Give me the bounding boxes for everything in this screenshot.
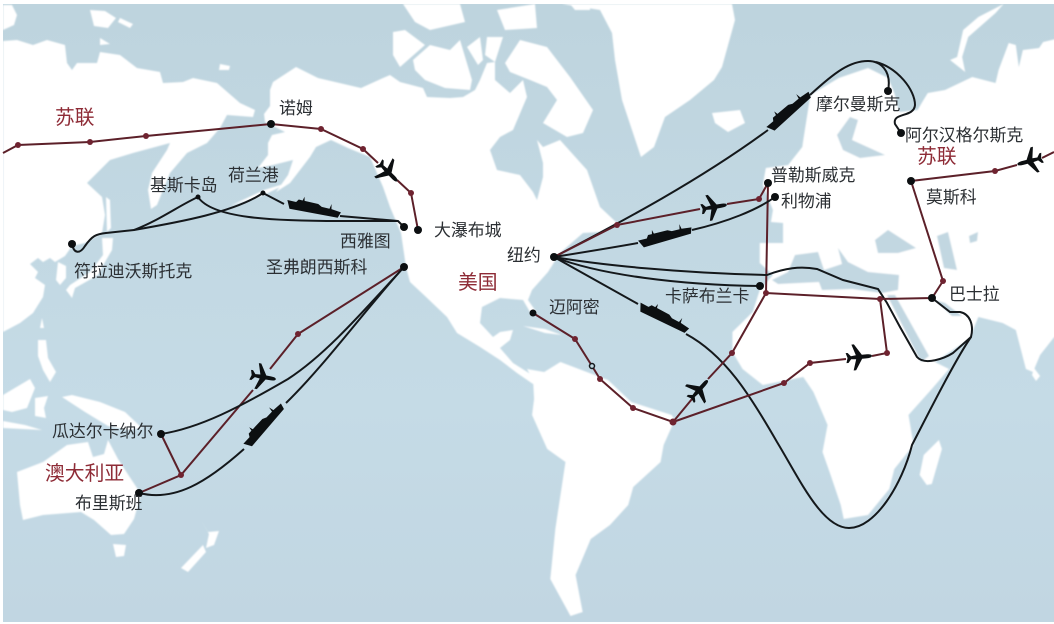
labels [45, 95, 1023, 513]
label: Great Falls: 大瀑布城 [434, 221, 502, 240]
land: Novaya Zemlya [950, 4, 1004, 72]
land: Madagascar [920, 440, 942, 485]
sea: Red Sea [887, 295, 929, 362]
land: Iceland [712, 110, 745, 132]
label: Murmansk: 摩尔曼斯克 [816, 95, 901, 114]
icon: airplane, South Pacific [248, 362, 278, 392]
icon: airplane, Siberia [1014, 145, 1046, 177]
icon: ship, Barents route [762, 86, 814, 133]
route: North Pacific shipping [68, 190, 408, 252]
label: Moscow: 莫斯科 [926, 188, 977, 207]
label: Vladivostok: 符拉迪沃斯托克 [74, 262, 192, 281]
land: Canadian Arctic islands [393, 4, 593, 137]
land: Korea [56, 262, 66, 285]
land: northern sea islands [3, 5, 230, 70]
label: Soviet Union west: 苏联 [55, 107, 95, 129]
sea: Black Sea [875, 230, 916, 253]
land: Taiwan and Philippines [38, 318, 56, 382]
land: Eurasia and Africa east [527, 4, 1054, 616]
seas inside land [772, 117, 978, 362]
land: New Zealand [181, 520, 219, 572]
route: South Pacific shipping [135, 263, 408, 497]
icon: airplane, North Atlantic [699, 192, 729, 222]
sea: Persian Gulf [935, 300, 962, 316]
label: Miami: 迈阿密 [549, 298, 600, 317]
label: Soviet Union east: 苏联 [917, 146, 957, 168]
sea: Mediterranean [772, 248, 899, 293]
label: Basra: 巴士拉 [949, 285, 1000, 304]
label: Nome: 诺姆 [279, 99, 313, 118]
icon: airplane, Africa [845, 343, 873, 371]
icon: ship, Pacific [238, 399, 287, 449]
label: San Francisco: 圣弗朗西斯科 [266, 258, 367, 277]
routes [3, 61, 1054, 528]
node: New York [550, 253, 558, 261]
label: Dutch Harbor: 荷兰港 [228, 166, 279, 185]
land: Sakhalin and Japan [66, 197, 113, 298]
land: Aleutians [230, 182, 290, 206]
sea: Baltic [837, 117, 885, 158]
route: Atlantic to Casablanca and Suez [554, 257, 972, 528]
label: Seattle: 西雅图 [340, 232, 391, 251]
sea: Caspian [937, 232, 957, 270]
label: Casablanca: 卡萨布兰卡 [665, 287, 750, 306]
label: New York: 纽约 [507, 246, 541, 265]
route: North Atlantic to Arctic [554, 61, 915, 257]
label: Prestwick: 普勒斯威克 [771, 166, 856, 185]
label: USA: 美国 [458, 272, 498, 294]
land: South America [527, 362, 675, 616]
label: Brisbane: 布里斯班 [75, 494, 143, 513]
land: northeast Asia [3, 40, 255, 332]
land: Sri Lanka [1032, 368, 1040, 381]
icon: airplane, Alaska [370, 154, 406, 190]
label: Kiska: 基斯卡岛 [150, 176, 218, 195]
route: South Atlantic air [530, 152, 1054, 426]
label: Australia: 澳大利亚 [45, 463, 124, 485]
icon: ship, Gulf of Alaska [286, 193, 343, 220]
route: Atlantic to Britain [554, 179, 779, 293]
route: Pacific north air route [3, 120, 422, 234]
icon: ship, Liverpool route [636, 221, 693, 248]
land: North America [258, 62, 617, 384]
land: Greenland [562, 4, 735, 157]
label: Liverpool: 利物浦 [781, 192, 832, 211]
label: Guadalcanal: 瓜达尔卡纳尔 [52, 422, 153, 441]
sea: Aral [969, 232, 978, 243]
route: South Pacific air [139, 267, 404, 493]
land: Cuba [523, 326, 562, 335]
icon: airplane, South Atlantic [681, 372, 717, 408]
icon: ship, mid Atlantic [637, 296, 692, 336]
land: Australia [17, 440, 141, 557]
label: Arkhangelsk: 阿尔汉格尔斯克 [905, 126, 1023, 145]
land: Indonesia and New Guinea [3, 379, 142, 430]
